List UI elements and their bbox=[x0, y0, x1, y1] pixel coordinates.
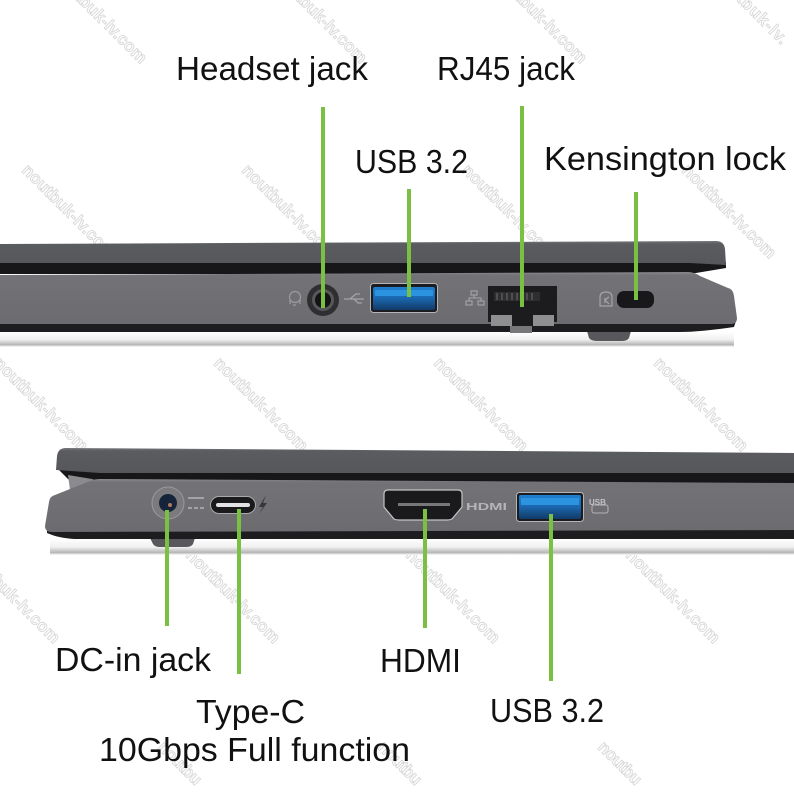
USB 10Gbps logo: USB bbox=[589, 498, 606, 507]
label: HDMI: HDMI bbox=[380, 642, 461, 679]
Kensington lock slot bbox=[617, 291, 654, 308]
label: Type-C: Type-C bbox=[196, 693, 305, 730]
line: headset jack bbox=[321, 107, 325, 308]
USB 3.2 port bbox=[516, 492, 584, 522]
callout lines bbox=[165, 106, 638, 681]
laptop left side view bbox=[45, 448, 794, 555]
rubber foot bbox=[150, 538, 195, 547]
label: 10Gbps Full function: 10Gbps Full function bbox=[99, 731, 410, 768]
watermarks: noutbuk-lv.com bbox=[430, 353, 532, 455]
power icon bbox=[188, 498, 204, 508]
label: USB 3.2 top: USB 3.2 bbox=[355, 143, 468, 180]
network icon bbox=[466, 291, 484, 305]
watermarks: noutbuk-lv.com bbox=[678, 160, 780, 262]
USB 10Gbps logo bbox=[589, 498, 608, 513]
hinge bbox=[68, 475, 98, 490]
dark gap between lid and base bbox=[58, 469, 794, 483]
HDMI port bbox=[384, 490, 462, 520]
watermarks: noutbu bbox=[154, 737, 206, 789]
headset icon bbox=[290, 292, 300, 305]
line: USB 3.2 bottom bbox=[549, 514, 553, 681]
line: Type-C bbox=[237, 509, 241, 674]
rubber foot bbox=[587, 331, 631, 341]
Thunderbolt icon bbox=[259, 495, 267, 514]
underside dark strip bbox=[0, 321, 736, 332]
line: USB 3.2 top bbox=[407, 189, 411, 297]
watermarks: noutbuk-lv.com bbox=[18, 160, 120, 262]
watermarks: noutbuk-lv.com bbox=[402, 545, 504, 647]
HDMI logo: HDMI bbox=[466, 502, 507, 513]
watermarks: noutbu bbox=[594, 737, 646, 789]
watermarks: noutbuk-lv.com bbox=[650, 353, 752, 455]
laptop lid bbox=[0, 241, 726, 265]
watermarks: noutbuk-lv.com bbox=[238, 160, 340, 262]
RJ45 port bbox=[488, 286, 557, 333]
watermarks: noutbuk-lv.com bbox=[458, 160, 560, 262]
label: Kensington lock: Kensington lock bbox=[544, 140, 787, 177]
label: RJ45 jack: RJ45 jack bbox=[437, 50, 575, 87]
laptop base bbox=[0, 272, 737, 324]
line: Kensington lock bbox=[634, 192, 638, 300]
DC-in jack bbox=[152, 487, 184, 519]
USB Type-C port bbox=[210, 496, 256, 514]
underside dark strip bbox=[47, 530, 794, 539]
Kensington icon bbox=[600, 292, 612, 306]
watermarks: noutbuk-lv.com bbox=[622, 545, 724, 647]
laptop lid bbox=[56, 448, 794, 473]
USB symbol bbox=[344, 294, 364, 303]
laptop right side view bbox=[0, 241, 737, 347]
label: DC-in jack: DC-in jack bbox=[55, 641, 211, 678]
line: HDMI bbox=[423, 509, 427, 628]
line: RJ45 jack bbox=[520, 106, 524, 307]
headset jack bbox=[307, 284, 339, 316]
watermarks: noutbu bbox=[374, 737, 426, 789]
watermarks: noutbuk-lv.com bbox=[182, 545, 284, 647]
label: Headset jack: Headset jack bbox=[176, 50, 369, 87]
dark gap between lid and base bbox=[0, 262, 726, 274]
watermarks: noutbuk-lv.com bbox=[210, 353, 312, 455]
label: USB 3.2 bottom: USB 3.2 bbox=[490, 692, 604, 729]
laptop base bbox=[45, 479, 794, 532]
shadow under top laptop bbox=[0, 332, 734, 347]
line: DC-in jack bbox=[165, 510, 169, 626]
shadow under bottom laptop bbox=[50, 539, 794, 555]
USB 3.2 port bbox=[370, 284, 438, 312]
